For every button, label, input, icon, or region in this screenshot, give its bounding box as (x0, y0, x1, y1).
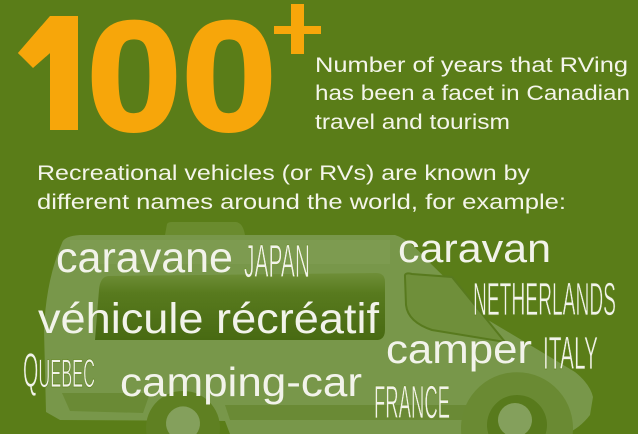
side window (95, 273, 385, 340)
vehicule recreatif: véhicule récréatif (38, 295, 380, 343)
front wheel hub (498, 403, 532, 434)
van upper band (70, 240, 390, 264)
description of years: has been a facet in Canadian (315, 81, 630, 105)
intro text: Recreational vehicles (or RVs) are known by (37, 161, 530, 185)
van body (44, 235, 593, 434)
word cloud: FRANCE (374, 376, 450, 428)
cab window (405, 273, 505, 342)
front fender (461, 372, 573, 434)
plus sign (274, 4, 321, 54)
camping-car: camping-car (120, 359, 362, 405)
front tyre (487, 395, 547, 434)
intro text: different names around the world, for example: (37, 190, 566, 214)
word cloud: QUEBEC (23, 345, 95, 398)
caravan: caravan (398, 227, 551, 271)
van roof pod (165, 222, 245, 235)
intro text (37, 161, 566, 214)
big number 100 (18, 16, 272, 133)
description of years (315, 53, 630, 134)
word cloud: JAPAN (244, 235, 310, 287)
description of years: travel and tourism (315, 110, 510, 134)
rear wheel arch (146, 391, 220, 434)
van illustration (44, 222, 593, 434)
rear wheel hub (166, 406, 200, 434)
camper: camper (386, 326, 532, 372)
word cloud (23, 227, 616, 428)
side skirt (62, 393, 472, 420)
caravane: caravane (56, 234, 233, 282)
description of years: Number of years that RVing (315, 53, 628, 77)
